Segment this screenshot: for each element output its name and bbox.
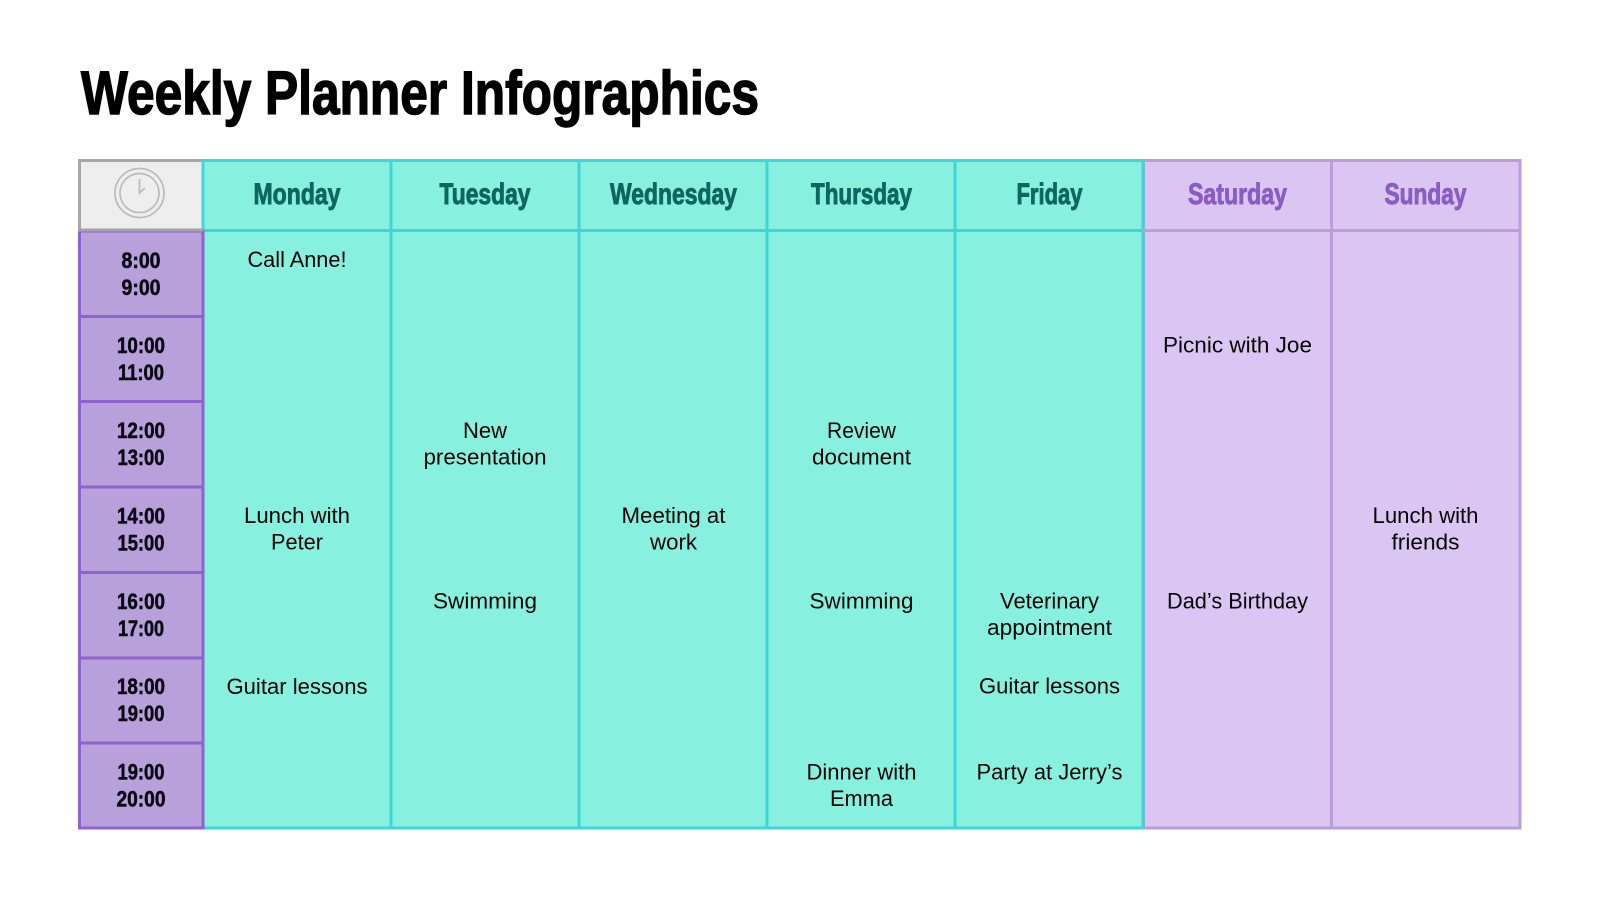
time labels: 19:00 [118,701,164,726]
events: Friday: Veterinary [1000,588,1099,614]
clock header cell [80,160,203,230]
events: Tuesday: Swimming [433,588,537,614]
events: Friday: Party at Jerry’s [976,760,1122,784]
day headers: Sunday [1384,178,1467,211]
events: Thursday: document [812,444,911,470]
panel: time column [78,230,203,828]
day headers: Wednesday [610,178,737,211]
events: Monday: Lunch with [244,503,350,528]
events: Thursday: Review [827,418,896,443]
events: Monday: Guitar lessons [226,674,368,699]
events: Wednesday: Meeting at [622,503,726,528]
panel: weekend columns [1143,159,1520,830]
events: Sunday: Lunch with [1372,503,1478,528]
time labels: 8:00 [122,248,160,273]
events: Tuesday: presentation [424,444,546,470]
time labels: 13:00 [118,445,164,470]
events: Sunday [1372,503,1478,554]
planner table [78,159,1520,830]
day headers: Saturday [1188,178,1287,211]
time labels: 10:00 [117,333,165,358]
events: Thursday: Dinner with [806,760,916,784]
time labels: 11:00 [118,360,164,385]
time labels: 15:00 [118,530,164,556]
events: Tuesday [424,418,546,614]
events: Monday: Call Anne! [248,247,346,272]
title: Weekly Planner Infographics [81,59,759,127]
events: Thursday: Emma [830,786,894,811]
day headers: Tuesday [440,178,531,211]
events: Thursday [806,418,916,811]
time labels: 14:00 [117,504,165,528]
time labels: 9:00 [122,275,160,300]
panel: weekday columns [203,160,1143,828]
events: Sunday: friends [1392,530,1460,554]
day headers: Monday [254,178,341,211]
time labels: 16:00 [117,589,165,614]
events: Friday: appointment [987,615,1112,640]
day headers: Friday [1016,178,1083,211]
events: Saturday [1163,332,1312,614]
time labels [116,248,166,812]
events: Friday: Guitar lessons [979,674,1120,698]
icon: clock [115,168,164,218]
events: Saturday: Dad’s Birthday [1167,588,1308,614]
events: Monday: Peter [271,530,323,554]
events: Saturday: Picnic with Joe [1163,332,1312,358]
events: Tuesday: New [463,418,507,443]
events: Monday [226,247,368,699]
events: Friday [976,588,1122,784]
time labels: 19:00 [118,760,164,784]
events: Thursday: Swimming [810,588,914,614]
time labels: 18:00 [117,674,165,699]
time labels: 20:00 [116,786,166,812]
day headers: Thursday [811,178,912,211]
events: Wednesday: work [649,530,698,554]
events: Wednesday [622,503,726,554]
day headers [254,178,1467,211]
time labels: 12:00 [117,418,165,443]
time labels: 17:00 [118,616,164,641]
